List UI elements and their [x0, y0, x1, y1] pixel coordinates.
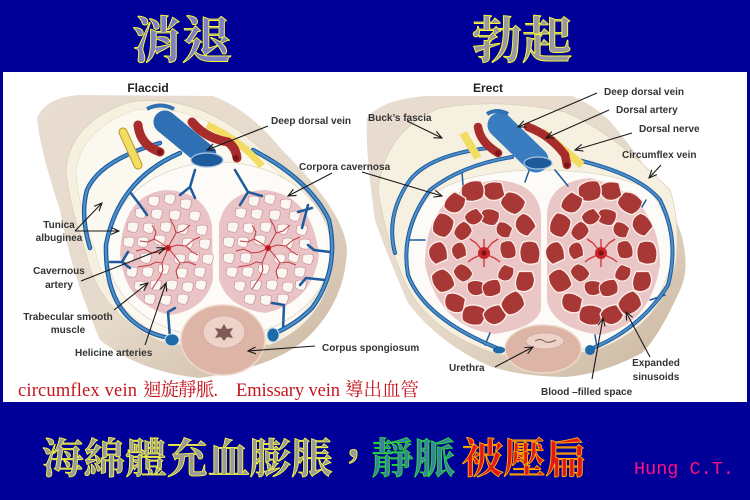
label: Corpora cavernosa: Corpora cavernosa	[299, 162, 391, 173]
label: Flaccid: Flaccid	[127, 81, 169, 95]
arrow: expanded sinusoids	[626, 312, 650, 357]
label: Helicine arteries: Helicine arteries	[75, 348, 153, 359]
arrow: circumflex vein	[649, 165, 661, 178]
arrow: corpus spongiosum	[248, 346, 315, 351]
right corpus cavernosum	[545, 178, 660, 335]
label: Blood-filled space: Blood –filled space	[541, 387, 633, 398]
deep dorsal vein	[487, 111, 552, 169]
arrow: dorsal nerve	[575, 133, 632, 150]
caption: vein terms	[18, 380, 419, 401]
label: Expanded sinusoids: Expanded	[632, 358, 680, 369]
fascia layers	[378, 104, 677, 355]
tunica albuginea	[408, 170, 672, 351]
label: Deep dorsal vein: Deep dorsal vein	[271, 116, 351, 127]
label: Dorsal artery: Dorsal artery	[616, 105, 678, 116]
tunica albuginea	[107, 162, 331, 338]
label: Tunica albuginea: albuginea	[36, 233, 83, 244]
label: Trabecular smooth muscle: muscle	[51, 325, 86, 336]
panel: flaccid cross section	[37, 95, 347, 378]
caption: vein terms: circumflex vein	[18, 381, 137, 401]
label: Buck's fascia: Buck’s fascia	[368, 113, 432, 124]
heading: 消退: 消退	[132, 13, 232, 69]
caption: vein terms: Emissary vein	[236, 381, 340, 401]
label: Tunica albuginea: Tunica	[43, 220, 75, 231]
heading: 勃起: 勃起	[472, 13, 572, 69]
corpus spongiosum	[505, 325, 581, 373]
dorsal arteries	[478, 127, 570, 168]
label: Dorsal nerve: Dorsal nerve	[639, 124, 700, 135]
arrow: urethra	[495, 347, 533, 367]
text: veins: 靜脈	[372, 436, 455, 482]
credit: Hung C.T.	[634, 459, 734, 480]
fascia inner band	[76, 109, 328, 340]
arrow: cavernous artery	[81, 248, 165, 281]
arrow: Buck's fascia	[407, 121, 442, 138]
arrow: tunica to ring	[75, 230, 119, 232]
label: Trabecular smooth muscle: Trabecular smooth	[23, 312, 113, 323]
bottom statement	[42, 436, 587, 482]
arrow: deep dorsal vein	[207, 126, 268, 150]
panel: erect cross section	[367, 96, 686, 377]
right corpus cavernosum	[219, 190, 319, 313]
label: Deep dorsal vein erect: Deep dorsal vein	[604, 87, 684, 98]
dorsal arteries	[138, 122, 239, 161]
deep dorsal vein	[147, 106, 223, 167]
label: Expanded sinusoids: sinusoids	[633, 372, 680, 383]
arrow: blood-filled space	[592, 318, 603, 379]
text: compressed: 被壓扁	[462, 436, 587, 482]
circumflex veins	[392, 148, 672, 355]
arrow: corpora cavernosa left	[288, 173, 332, 196]
circumflex veins	[84, 143, 332, 346]
label: Cavernous artery: artery	[45, 280, 73, 291]
arrow: dorsal artery	[546, 110, 609, 138]
left corpus cavernosum	[425, 179, 541, 334]
white panel	[3, 72, 747, 402]
skin outline	[37, 95, 347, 378]
skin outline	[367, 96, 686, 377]
label: Urethra: Urethra	[449, 363, 485, 374]
arrows: tunica albuginea	[75, 203, 102, 231]
arrow: helicine arteries	[145, 283, 166, 345]
text: engorgement: 海綿體充血膨脹，	[42, 436, 374, 482]
caption: vein terms: 迴旋靜脈.	[143, 380, 218, 401]
label: Corpus spongiosum: Corpus spongiosum	[322, 343, 419, 354]
arrow: deep dorsal vein erect	[518, 93, 597, 127]
arrow: trabecular smooth muscle	[114, 283, 148, 310]
fascia layers	[66, 101, 335, 345]
label: Erect: Erect	[473, 81, 503, 95]
arrow: corpora cavernosa right	[362, 172, 442, 196]
corpus spongiosum	[181, 305, 265, 375]
caption: vein terms: 導出血管	[345, 380, 419, 401]
left corpus cavernosum	[120, 190, 213, 315]
dorsal nerves	[123, 125, 262, 166]
dorsal nerves	[463, 132, 582, 165]
label: Circumflex vein: Circumflex vein	[622, 150, 696, 161]
label: Cavernous artery: Cavernous	[33, 266, 85, 277]
